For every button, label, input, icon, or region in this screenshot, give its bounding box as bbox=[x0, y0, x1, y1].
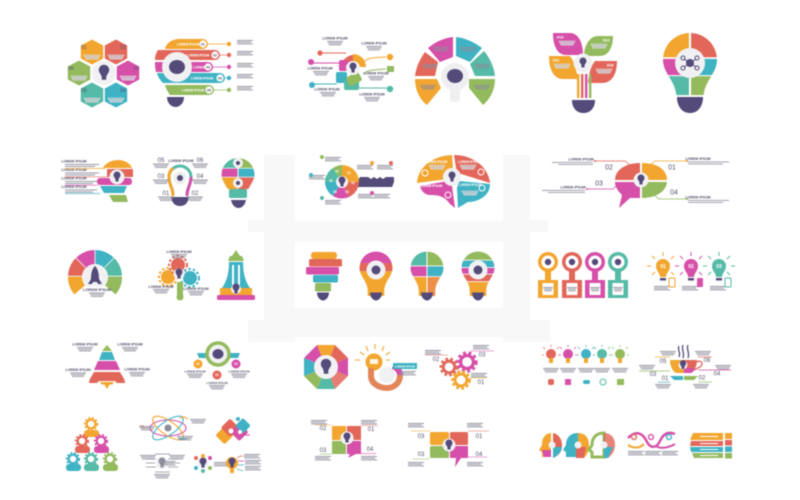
outlined bulb with six labels: 04 bbox=[197, 174, 204, 180]
hexagon petal diagram: 06 bbox=[68, 66, 74, 72]
chess tower diagram bbox=[217, 250, 255, 300]
hexagon petal diagram: 05 bbox=[81, 88, 87, 94]
coffee cup diagram: 06 bbox=[704, 358, 711, 364]
three glowing bulbs bbox=[647, 252, 735, 290]
brain ring with three numbered circles: 02 bbox=[215, 373, 219, 377]
brain shaped diagram bbox=[417, 155, 490, 208]
outlined bulb with six labels: 01 bbox=[163, 191, 170, 197]
leaf plant bulb timeline: 2016 bbox=[556, 36, 564, 40]
key shaped circular diagram bbox=[309, 155, 394, 204]
five small glowing bulbs bbox=[542, 345, 629, 385]
hexagon petal diagram: 01 bbox=[81, 45, 87, 51]
rocket layered diagram: LOREM IPSUM bbox=[117, 342, 143, 346]
bulb with five banded labels: 02 bbox=[213, 53, 217, 57]
bulb with five banded labels: 03 bbox=[206, 65, 210, 69]
hexagon petal diagram: 02 bbox=[120, 45, 126, 51]
leaf plant bulb timeline bbox=[549, 33, 617, 113]
small glowing bulb with branches bbox=[226, 454, 261, 473]
puzzle wheel with connectors: LOREM IPSUM bbox=[307, 66, 333, 70]
speech bubble puzzle with four labels: 04 bbox=[670, 190, 678, 196]
brain shaped diagram: LOREM IPSUM bbox=[425, 160, 448, 164]
bulb with five banded labels: 05 bbox=[207, 88, 211, 92]
orbit cluster diagram bbox=[139, 412, 206, 444]
coffee cup diagram: 01 bbox=[662, 376, 669, 382]
brain ring with three numbered circles: LOREM IPSUM bbox=[184, 370, 206, 374]
puzzle wheel with connectors: LOREM IPSUM bbox=[314, 88, 340, 92]
rocket layered diagram: LOREM IPSUM bbox=[72, 342, 98, 346]
outlined bulb with six labels: 05 bbox=[158, 158, 165, 164]
three interlocking gears: 01 bbox=[478, 380, 485, 386]
bulb with offset stripes bbox=[306, 252, 342, 300]
speech bubble puzzle with four labels: LOREM IPSUM bbox=[685, 157, 711, 161]
coffee cup diagram: 05 bbox=[660, 359, 667, 365]
speech bubble puzzle with four labels: LOREM IPSUM bbox=[685, 196, 711, 200]
wave timeline with pins bbox=[628, 433, 678, 455]
square speech puzzle bbox=[311, 420, 378, 460]
square speech puzzle: 02 bbox=[320, 426, 327, 432]
hexagon petal diagram: 03 bbox=[133, 66, 139, 72]
square speech puzzle: 04 bbox=[367, 447, 374, 453]
hexagon petal diagram bbox=[68, 40, 139, 108]
three interlocking gears bbox=[425, 345, 494, 388]
bulb with five banded labels: 01 bbox=[201, 42, 205, 46]
key shaped circular diagram: 02 bbox=[351, 181, 355, 185]
bulb with interlocking segments bbox=[220, 156, 256, 208]
wide speech puzzle: 01 bbox=[476, 434, 483, 440]
brain ring with three numbered circles: LOREM IPSUM bbox=[228, 370, 250, 374]
puzzle wheel with connectors: LOREM IPSUM bbox=[363, 72, 389, 76]
brain ring with three numbered circles: LOREM IPSUM bbox=[206, 381, 228, 385]
diamond cluster diagram bbox=[215, 417, 251, 444]
rocket layered diagram: LOREM IPSUM bbox=[124, 368, 150, 372]
horizontally striped bulb bbox=[460, 250, 496, 300]
key shaped circular diagram: 04 bbox=[335, 170, 339, 174]
octagon wheel bbox=[304, 345, 348, 389]
rocket layered diagram bbox=[65, 342, 150, 389]
head shaped band diagram: LOREM IPSUM bbox=[61, 160, 87, 164]
rocket fan diagram: LOREM IPSUM bbox=[83, 287, 112, 292]
puzzle wheel with connectors: LOREM IPSUM bbox=[322, 36, 348, 40]
puzzle wheel with connectors: LOREM IPSUM bbox=[359, 92, 385, 96]
speech bubble puzzle with four labels: 02 bbox=[605, 164, 613, 172]
head shaped band diagram: LOREM IPSUM bbox=[61, 176, 87, 180]
speech bubble puzzle with four labels: 03 bbox=[595, 180, 603, 188]
leaf plant bulb timeline: 2023 bbox=[602, 38, 610, 42]
magenta and orange bulb bbox=[358, 250, 394, 300]
three interlocking gears: 02 bbox=[433, 357, 440, 363]
coffee cup diagram bbox=[639, 345, 731, 388]
bulb with five banded labels: LOREM IPSUM bbox=[187, 54, 210, 58]
bulb with five banded labels: 04 bbox=[218, 76, 222, 80]
three glowing bulbs: 01 bbox=[660, 264, 666, 270]
head shaped band diagram: LOREM IPSUM bbox=[61, 185, 87, 189]
quartered bulb bbox=[409, 250, 445, 300]
six segment fan with brain bulb bbox=[415, 37, 495, 105]
rocket fan diagram bbox=[68, 250, 122, 297]
puzzle gear and key diagram: LOREM IPSUM bbox=[148, 285, 174, 289]
three head diagrams bbox=[539, 433, 615, 458]
puzzle wheel with connectors: LOREM IPSUM bbox=[361, 42, 387, 46]
puzzle wheel with connectors bbox=[307, 36, 394, 101]
speech bubble puzzle with four labels: LOREM IPSUM bbox=[560, 186, 586, 190]
wide speech puzzle bbox=[408, 423, 489, 467]
wide speech puzzle: 03 bbox=[418, 452, 425, 458]
leaf plant bulb timeline: 2026 bbox=[606, 64, 614, 68]
wide speech puzzle: 04 bbox=[476, 452, 483, 458]
brain ring with three numbered circles bbox=[184, 343, 250, 389]
key shaped circular diagram: 06 bbox=[333, 190, 337, 194]
key shaped circular diagram: 01 bbox=[347, 171, 351, 175]
three glowing bulbs: 03 bbox=[716, 264, 722, 270]
wide speech puzzle: 03 bbox=[418, 434, 425, 440]
square speech puzzle: 01 bbox=[368, 427, 375, 433]
speech bubble puzzle with four labels: 01 bbox=[668, 164, 676, 172]
puzzle gear and key diagram: LOREM IPSUM bbox=[183, 287, 209, 291]
glowing bulb with ring label bbox=[355, 344, 417, 388]
glowing bulb with ring label: LOREM IPSUM bbox=[395, 364, 416, 368]
stacked arrow banners bbox=[690, 433, 732, 458]
leaf plant bulb timeline: 2021 bbox=[552, 58, 560, 62]
puzzle gear and key diagram: LOREM IPSUM bbox=[166, 250, 192, 254]
bulb with five banded labels: LOREM IPSUM bbox=[182, 88, 205, 92]
brain shaped diagram: LOREM IPSUM bbox=[420, 184, 443, 188]
bulb with five banded labels: LOREM IPSUM bbox=[177, 42, 200, 46]
background panels bbox=[248, 155, 550, 342]
bulb with five banded labels: LOREM IPSUM bbox=[191, 76, 214, 80]
brain ring with three numbered circles: 03 bbox=[234, 362, 238, 366]
key shaped circular diagram: 05 bbox=[329, 179, 333, 183]
speech bubble puzzle with four labels bbox=[542, 157, 729, 208]
outlined bulb with six labels: 02 bbox=[192, 191, 199, 197]
bulb with five banded labels: LOREM bbox=[193, 66, 205, 70]
people pyramid bbox=[66, 418, 118, 471]
bulb with five banded labels bbox=[155, 39, 253, 107]
brain shaped diagram: LOREM IPSUM bbox=[459, 183, 482, 187]
head shaped band diagram: LOREM IPSUM bbox=[61, 168, 87, 172]
rocket layered diagram: LOREM IPSUM bbox=[65, 368, 91, 372]
outlined bulb with six labels bbox=[153, 158, 208, 206]
coffee cup diagram: 02 bbox=[699, 376, 706, 382]
puzzle gear and key diagram bbox=[148, 250, 209, 300]
map pin card row bbox=[538, 252, 628, 298]
small hub cluster bbox=[161, 454, 230, 473]
brain ring with three numbered circles: 01 bbox=[196, 362, 200, 366]
three glowing bulbs: 02 bbox=[688, 264, 694, 270]
coffee cup diagram: 04 bbox=[714, 372, 721, 378]
outlined bulb with six labels: LOREM IPSUM bbox=[168, 159, 194, 163]
head shaped band diagram bbox=[61, 160, 133, 202]
segmented light bulb with network icon bbox=[660, 30, 720, 113]
brain shaped diagram: LOREM IPSUM bbox=[458, 160, 481, 164]
radial text cluster bbox=[140, 454, 185, 478]
outlined bulb with six labels: 06 bbox=[197, 158, 204, 164]
three interlocking gears: 03 bbox=[479, 352, 486, 358]
square speech puzzle: 03 bbox=[320, 448, 327, 454]
coffee cup diagram: 03 bbox=[650, 372, 657, 378]
key shaped circular diagram: 03 bbox=[345, 190, 349, 194]
hexagon petal diagram: 04 bbox=[120, 88, 126, 94]
outlined bulb with six labels: 03 bbox=[158, 174, 165, 180]
speech bubble puzzle with four labels: LOREM IPSUM bbox=[568, 158, 594, 162]
